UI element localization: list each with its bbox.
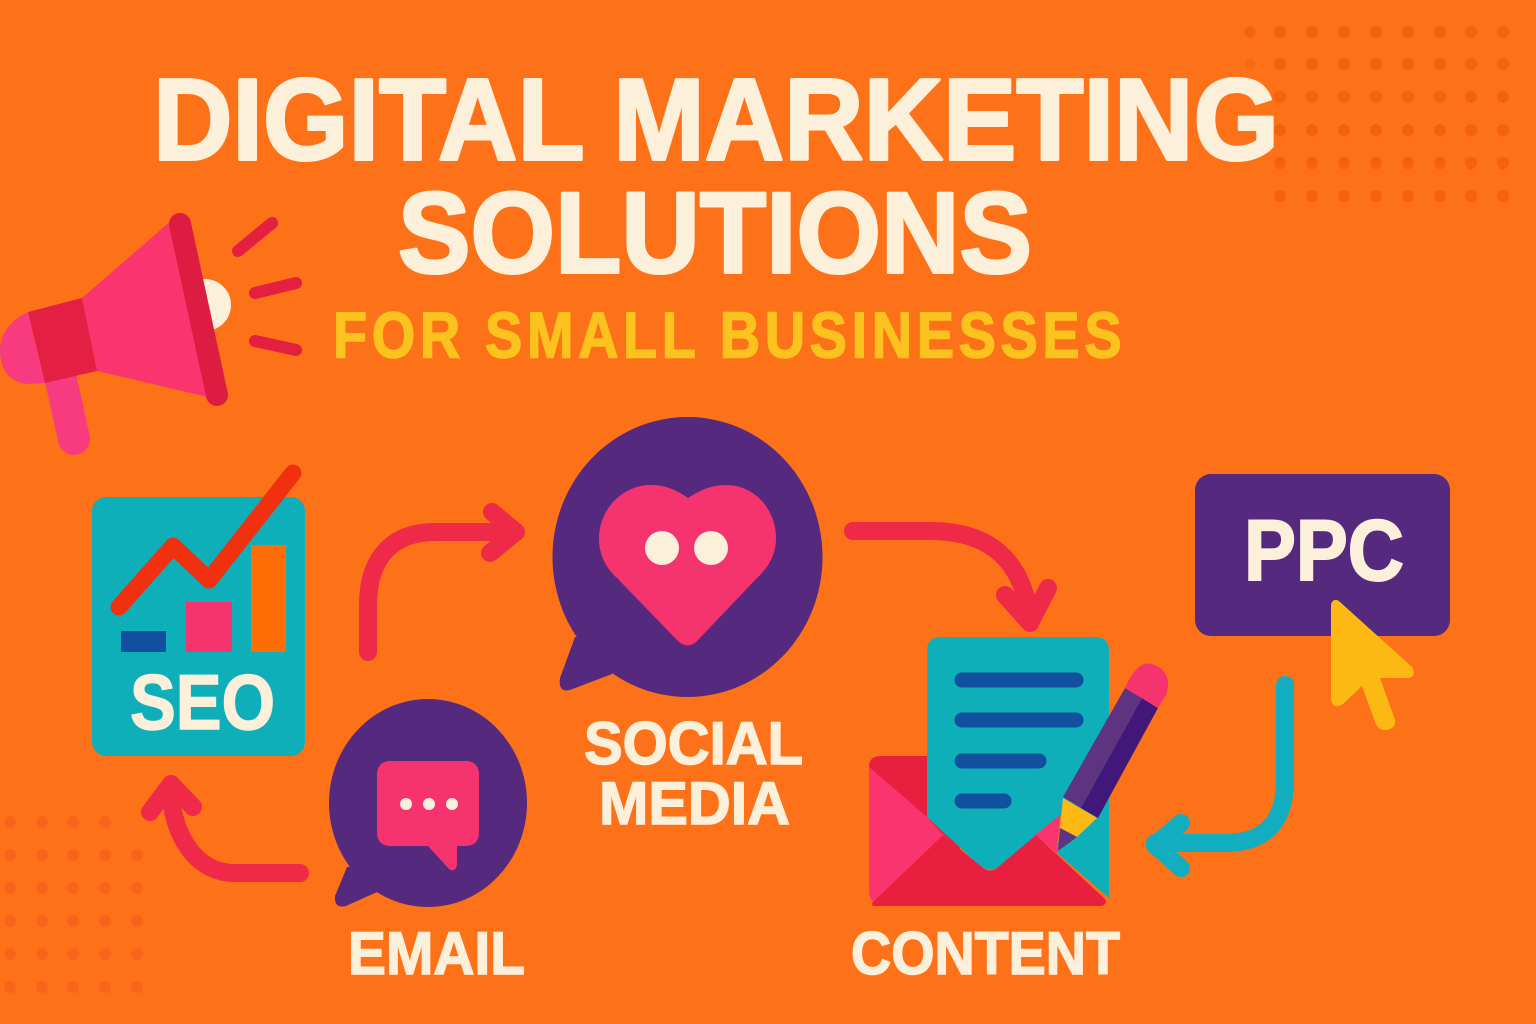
icon: social media bubble	[552, 417, 822, 697]
title: DIGITAL MARKETING	[153, 54, 1279, 184]
social media label	[584, 710, 803, 837]
subtitle: FOR SMALL BUSINESSES	[333, 299, 1122, 371]
document lines	[962, 680, 1076, 801]
panel: PPC button: PPC	[1244, 503, 1404, 599]
email label: EMAIL	[348, 920, 525, 987]
content label: CONTENT	[851, 920, 1120, 987]
title: SOLUTIONS	[398, 170, 1032, 298]
icon: content envelope and document	[869, 637, 1168, 906]
SEO label: SEO	[130, 658, 275, 746]
icon: cursor	[1331, 600, 1414, 730]
arrow: social to content	[853, 531, 1048, 623]
icon: megaphone	[0, 220, 296, 439]
title	[153, 54, 1279, 298]
panel: PPC button	[1195, 474, 1450, 636]
arrow: email to SEO	[150, 784, 300, 873]
pencil	[1058, 664, 1168, 851]
bar chart	[121, 545, 286, 652]
trend line	[119, 473, 293, 607]
panel: SEO	[92, 473, 305, 756]
arrow: PPC to content	[1155, 685, 1285, 868]
icon: email bubble	[329, 699, 527, 907]
arrow: SEO to social	[368, 512, 516, 652]
social media label: MEDIA	[599, 770, 790, 837]
social media label: SOCIAL	[584, 710, 803, 777]
